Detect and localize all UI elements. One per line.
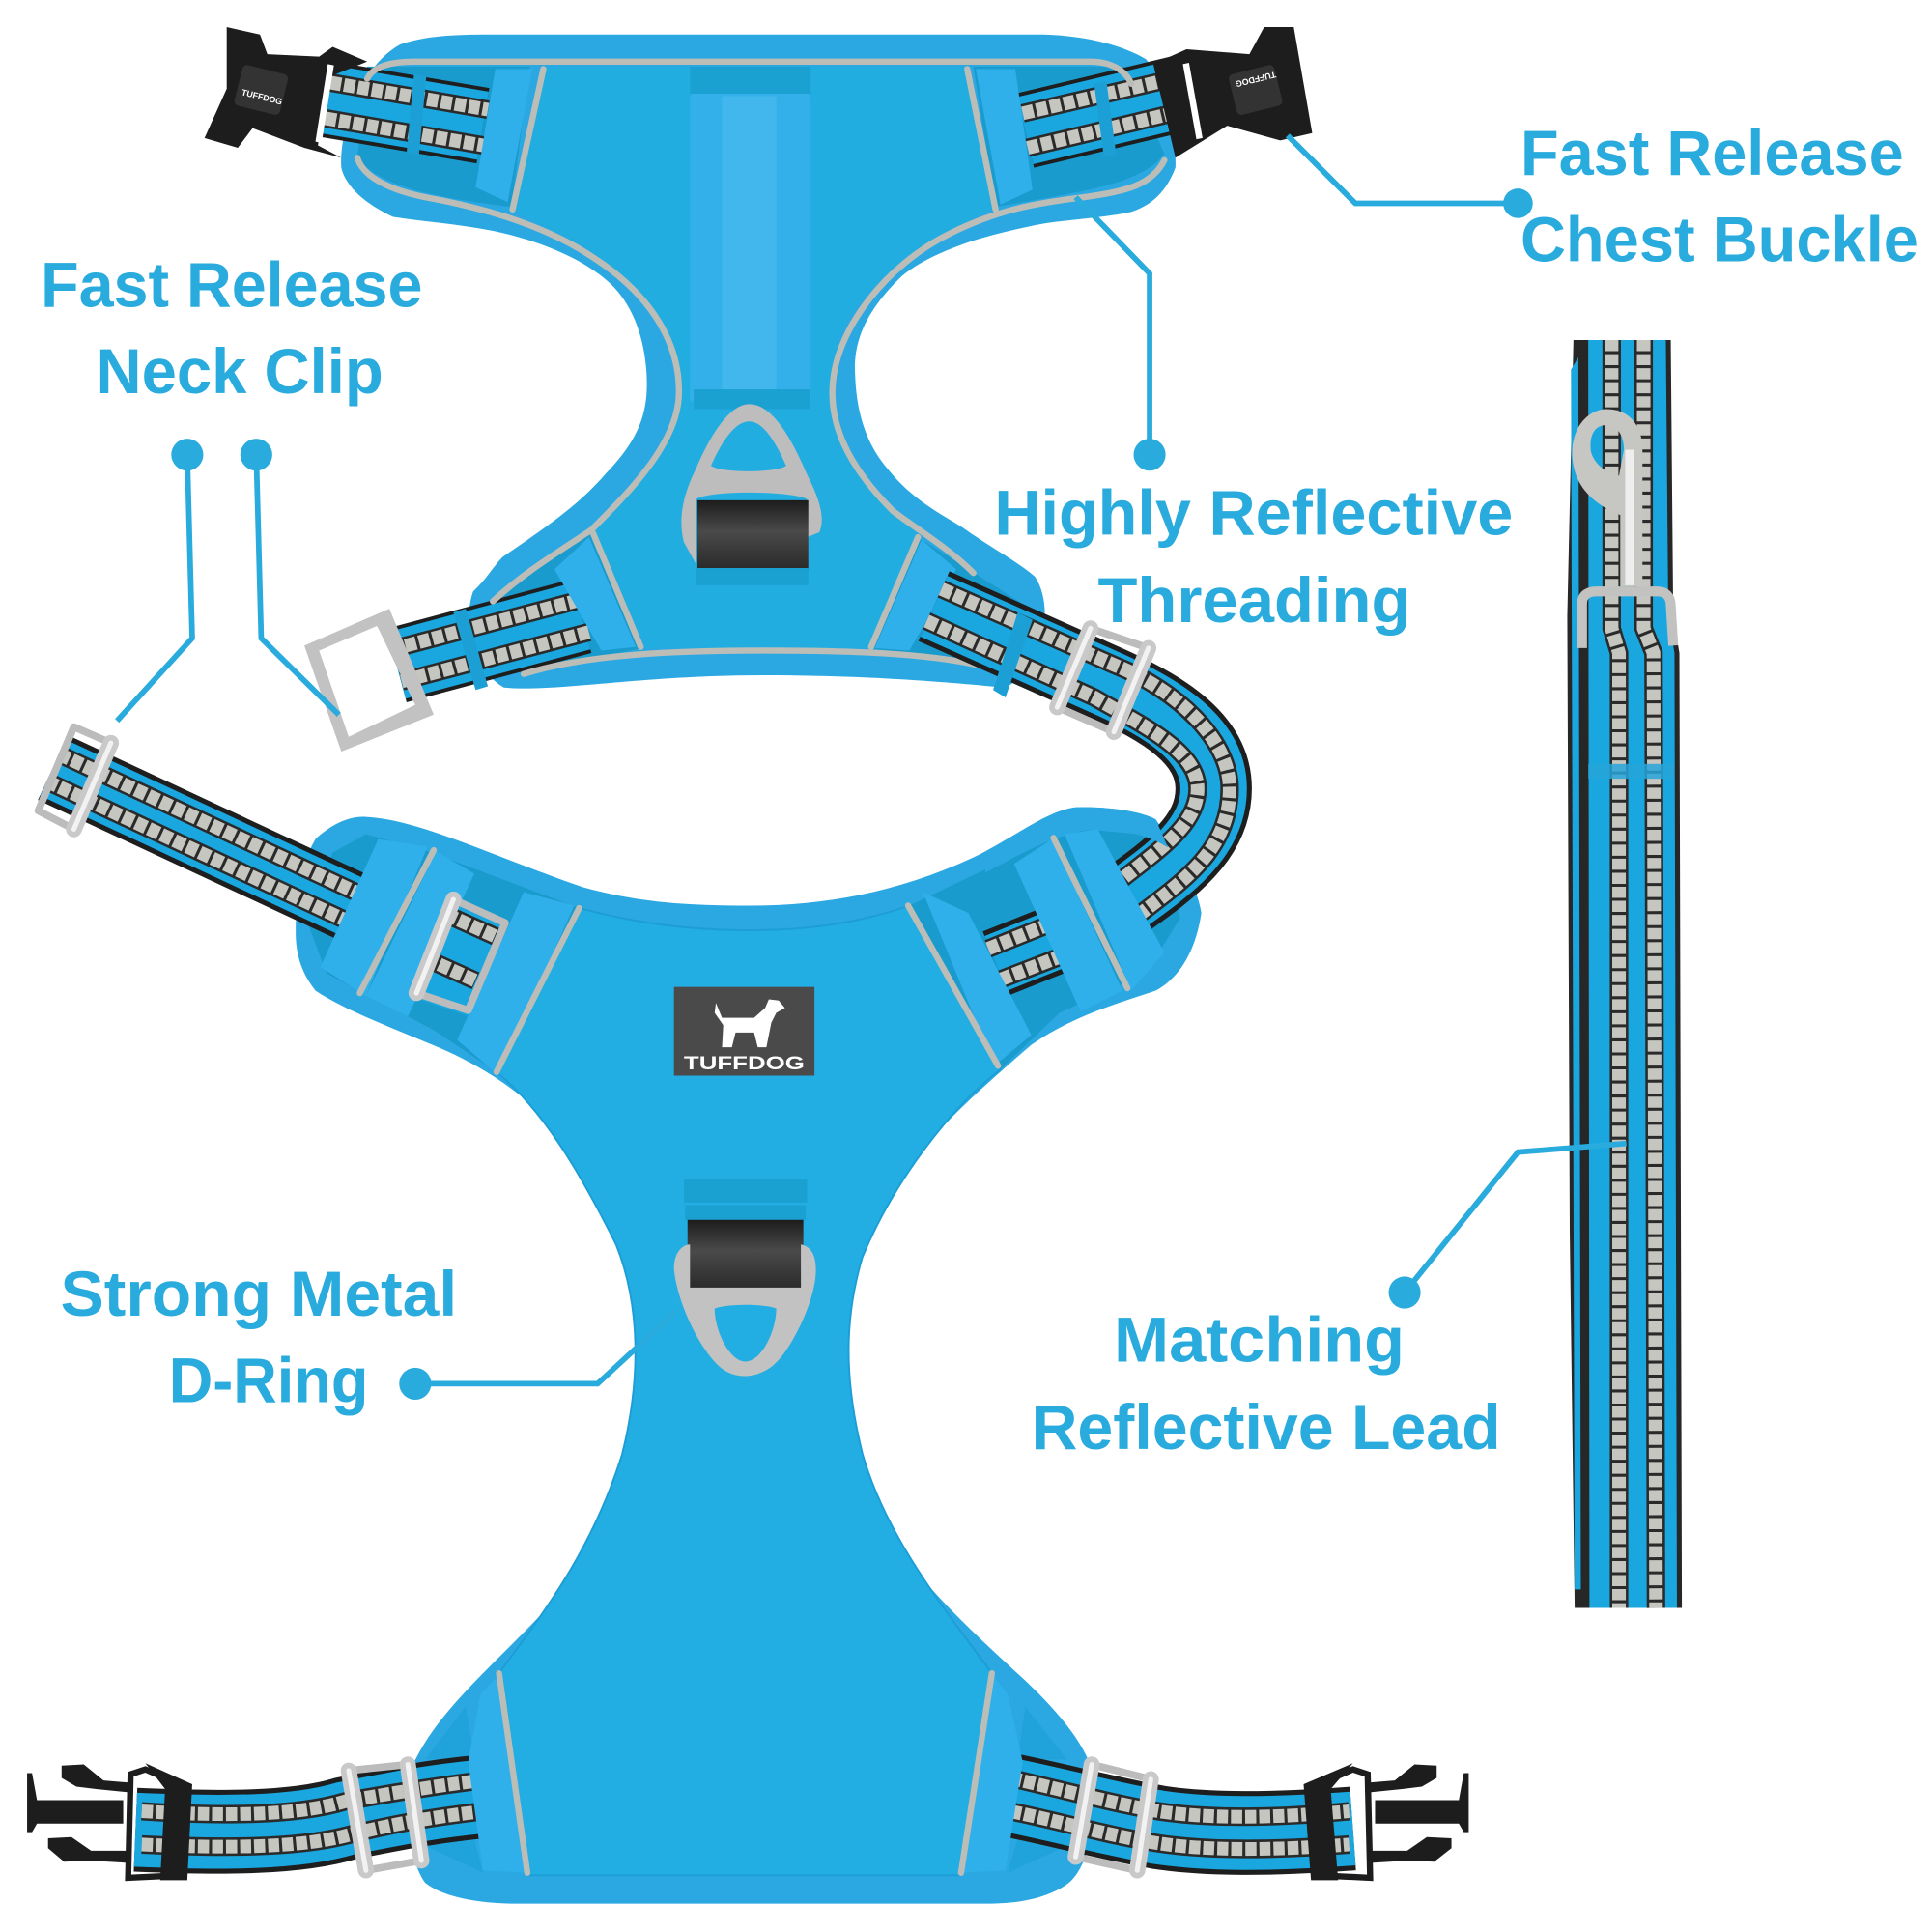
- padded strips: [475, 69, 1033, 650]
- bottom webbing tabs: [684, 1179, 807, 1289]
- bottom right strap: [1010, 1778, 1353, 1849]
- matching reflective lead: [1567, 340, 1682, 1608]
- callout: chest buckle: Fast Release: [1520, 118, 1904, 189]
- callout: chest buckle: [1288, 118, 1918, 275]
- callouts: [41, 118, 1918, 1463]
- bottom left buckle: [27, 1763, 192, 1880]
- bottom harness dark wings: [308, 828, 1180, 1873]
- bottom reflective piping: [359, 838, 1127, 1873]
- big curved strap connecting harnesses: [926, 589, 1230, 914]
- top harness dark inner wings: [357, 67, 1164, 671]
- right chest buckle: [1153, 27, 1312, 157]
- right chest buckle: TUFFDOG: [1235, 70, 1277, 89]
- top harness main panel: [511, 67, 996, 648]
- bottom D-ring: [674, 1244, 816, 1376]
- reflective piping: [357, 62, 1164, 674]
- left wing slider: [412, 895, 509, 1016]
- visible strap through right wing: [988, 924, 1065, 980]
- neck clip metal buckle: [304, 609, 434, 752]
- callout: matching lead: [1032, 1144, 1627, 1463]
- bottom left strap: [135, 1780, 483, 1847]
- lead blue stripes: [1571, 340, 1677, 1608]
- neck strap lower left: [392, 600, 589, 690]
- callout: D-ring: [60, 1259, 678, 1417]
- top D-ring: [681, 404, 822, 564]
- bottom harness details: [27, 829, 1468, 1880]
- chest strap right: [1023, 75, 1193, 157]
- lead metal loop: [1582, 591, 1673, 648]
- callout: chest buckle: Chest Buckle: [1520, 204, 1918, 275]
- callout: neck clip: [41, 250, 423, 721]
- lead webbing: [1567, 340, 1682, 1608]
- top harness (back view): [323, 35, 1193, 690]
- callout: matching lead: Matching: [1114, 1304, 1405, 1376]
- lead snap hook: [1573, 409, 1642, 586]
- top harness padded rim: [341, 35, 1176, 689]
- grab handle: [690, 67, 810, 409]
- lead reflective rows: [1588, 340, 1674, 1608]
- bottom main panel: [497, 906, 1001, 1875]
- left chest buckle: TUFFDOG: [241, 87, 283, 106]
- TUFFDOG logo patch: TUFFDOG: [684, 1054, 805, 1074]
- bottom strap sliders: [349, 1765, 1151, 1870]
- callout: reflective threading: Highly Reflective: [994, 478, 1513, 550]
- TUFFDOG logo patch: [674, 987, 814, 1076]
- callout: reflective threading: Threading: [1097, 565, 1410, 637]
- neck strap slider: [39, 727, 111, 829]
- chest strap left: [323, 74, 488, 156]
- callout: reflective threading: [994, 197, 1513, 637]
- padded strips: [321, 829, 1164, 1873]
- top harness sliders and buckles: [205, 27, 1312, 752]
- callout: D-ring: Strong Metal: [60, 1259, 457, 1330]
- callout: matching lead: Reflective Lead: [1032, 1392, 1501, 1463]
- dog silhouette: [715, 999, 784, 1047]
- left chest buckle: [205, 27, 367, 157]
- bottom harness top rim overlap: [980, 807, 1168, 872]
- callout: neck clip: Neck Clip: [96, 336, 384, 408]
- callout: neck clip: Fast Release: [41, 250, 422, 322]
- neck strap left: [46, 754, 363, 923]
- callout: D-ring: D-Ring: [169, 1346, 368, 1417]
- top webbing tab: [696, 500, 809, 585]
- bottom right buckle: [1303, 1763, 1468, 1880]
- slider on curved strap: [1057, 629, 1149, 732]
- bottom harness padded rim: [296, 807, 1202, 1904]
